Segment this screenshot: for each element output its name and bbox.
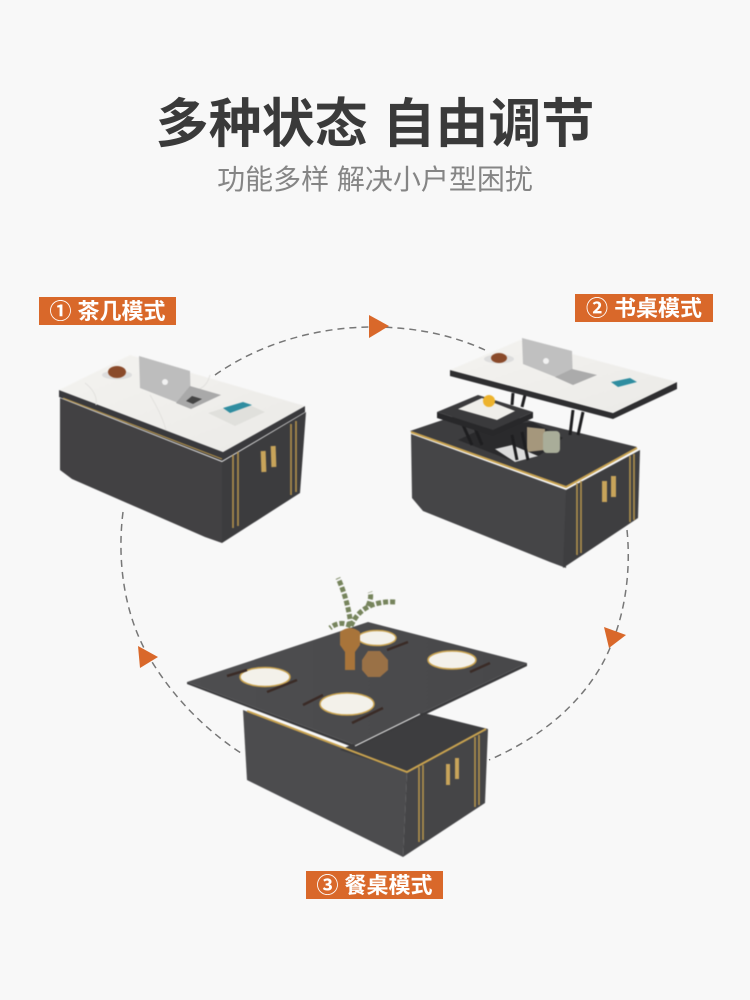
lift legs [463,393,583,460]
small shelf [437,395,533,436]
table 2: desk mode [410,338,677,568]
title: 多种状态 自由调节 [156,95,594,154]
vases [340,628,388,677]
teapot [102,366,132,380]
contents of storage [495,427,560,462]
label: desk mode: ② 书桌模式 [586,296,702,321]
laptop [139,356,221,409]
phone [611,378,637,387]
plant [330,578,396,628]
laptop [522,338,597,385]
book and phone [208,402,265,426]
teapot [484,353,514,364]
label: coffee table mode: ① 茶几模式 [49,299,166,324]
arrow: right [604,627,626,648]
plates [240,630,476,715]
label: dining mode: ③ 餐桌模式 [316,873,433,898]
dashed cycle arcs [121,327,628,760]
raised top [450,340,677,419]
table 1: coffee table mode [59,355,306,543]
arrow: left [138,646,158,668]
arrow: top [369,315,389,338]
subtitle: 功能多样 解决小户型困扰 [217,164,533,195]
table 3: dining mode [187,578,527,857]
cutlery [227,642,490,723]
